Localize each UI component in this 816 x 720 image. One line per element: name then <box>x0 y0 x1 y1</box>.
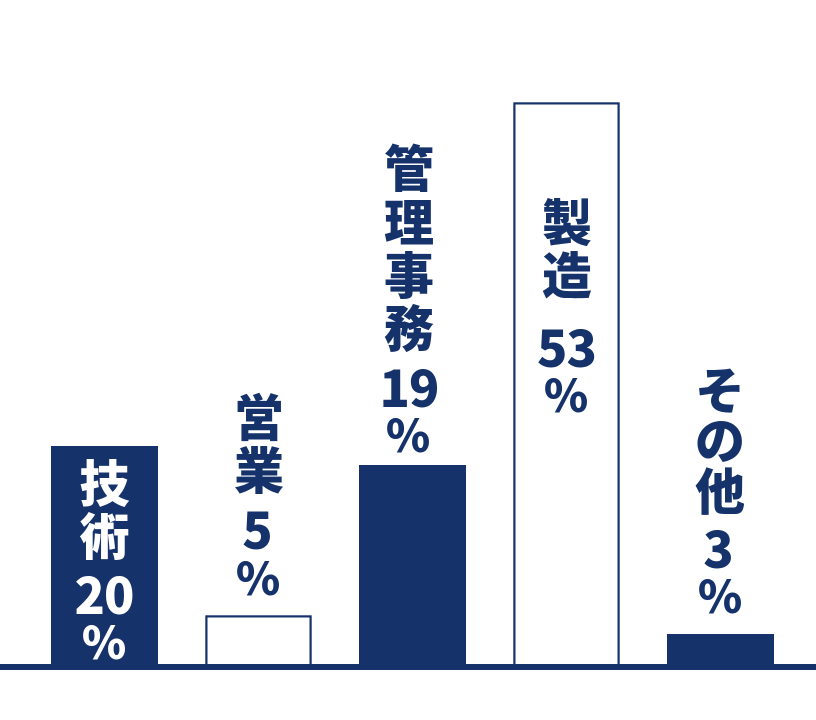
bar group: 技術 20%: 20 <box>75 557 133 629</box>
bar group: 製造 53% <box>514 103 619 665</box>
bar group: 営業 5%: 業 <box>234 432 284 504</box>
bar group: 管理事務 19%: 19 <box>380 350 438 422</box>
bar group: その他 3% <box>667 352 774 666</box>
bar group: 管理事務 19%: 事 <box>384 237 434 309</box>
bar group: その他 3%: 3 <box>703 511 733 583</box>
bar group: 管理事務 19%: 理 <box>384 184 434 256</box>
bar group: その他 3%: % <box>698 561 742 626</box>
bar group: 製造 53%: % <box>544 360 588 425</box>
bar group: 技術 20%: 術 <box>80 498 130 570</box>
bar group: 営業 5%: % <box>236 543 280 608</box>
bar group: 営業 5% <box>206 379 311 665</box>
bar group: 技術 20% <box>51 445 158 672</box>
bar group: 管理事務 19%: 管 <box>384 130 434 202</box>
bar group: 製造 53%: 製 <box>542 184 592 256</box>
bar group: その他 3%: の <box>695 402 745 474</box>
bar group: 管理事務 19%: 務 <box>384 290 434 362</box>
bar group: 製造 53%: 造 <box>542 237 592 309</box>
bar group: 営業 5%: 5 <box>242 492 272 564</box>
bar group: 技術 20%: 技 <box>80 445 130 517</box>
bar group: 製造 53%: 53 <box>537 310 596 382</box>
bar group: 営業 5%: 営 <box>234 379 284 451</box>
bar group: その他 3%: 他 <box>695 453 745 525</box>
bar group: 管理事務 19%: % <box>386 400 430 465</box>
bar group: 技術 20%: % <box>82 607 126 672</box>
bar group: その他 3%: そ <box>695 352 745 424</box>
baseline axis <box>0 664 816 670</box>
bar group: 管理事務 19% <box>359 130 466 666</box>
